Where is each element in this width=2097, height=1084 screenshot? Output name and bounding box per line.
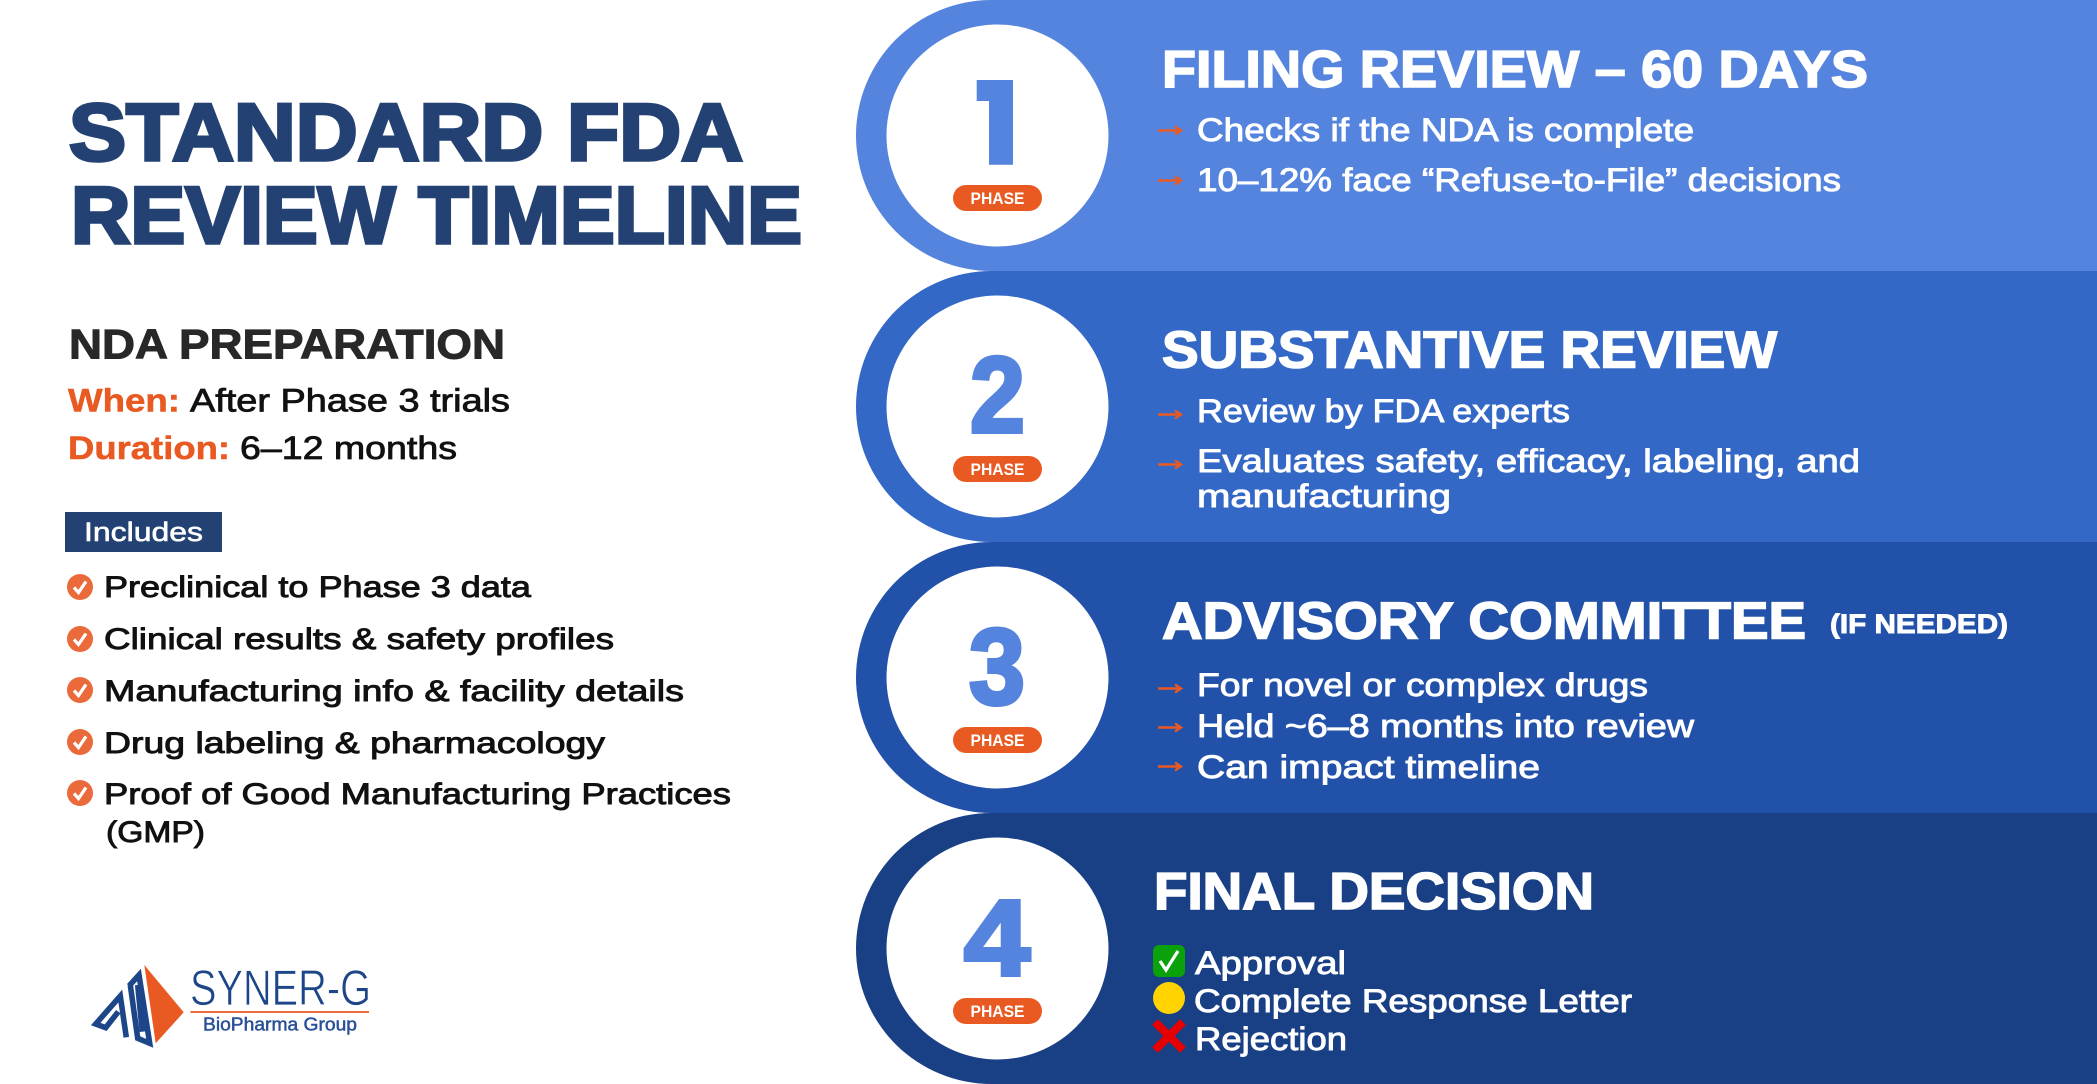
title: STANDARD FDA [69, 88, 743, 178]
logo mark [96, 965, 184, 1043]
text: duration: 6–12 months [240, 430, 457, 466]
title [69, 88, 802, 261]
panel: phase 4 final decision [856, 813, 2097, 1084]
item: good manufacturing practices: (GMP) [106, 816, 205, 849]
phase badge 4: PHASE [970, 1002, 1024, 1021]
label: includes [65, 512, 222, 552]
panel: NDA preparation [65, 320, 731, 849]
heading: NDA preparation: NDA PREPARATION [69, 320, 505, 368]
heading 4: FINAL DECISION [1154, 863, 1594, 921]
bullets 3: Can impact timeline [1197, 749, 1540, 785]
phase badge 2: PHASE [970, 460, 1024, 479]
phase badge 4: 4 [964, 877, 1030, 998]
logo: Syner-G BioPharma Group [96, 960, 371, 1043]
icon: yellow circle [1153, 982, 1185, 1014]
item: drug labeling: Drug labeling & pharmacology [104, 727, 605, 760]
phase badge 1 [886, 24, 1108, 246]
item: manufacturing info: Manufacturing info & facility details [104, 675, 684, 708]
panel: phase 3 advisory committee [856, 542, 2097, 813]
bullets 2 [1158, 393, 1860, 514]
bullets 2: manufacturing [1197, 478, 1451, 514]
icon: red cross [1155, 1022, 1183, 1050]
phase badge 3: PHASE [970, 731, 1024, 750]
text: when: After Phase 3 trials [190, 382, 510, 418]
wordmark: SYNER-G [190, 960, 371, 1016]
panel: phase 1 filing review [856, 0, 2097, 271]
item: preclinical data: Preclinical to Phase 3 data [104, 571, 531, 604]
heading 2: SUBSTANTIVE REVIEW [1162, 322, 1778, 380]
phase badge 1: PHASE [970, 189, 1024, 208]
text: duration: Duration: [68, 430, 230, 466]
heading 1: FILING REVIEW – 60 DAYS [1162, 41, 1868, 99]
label: includes: Includes [84, 517, 203, 547]
outcomes [1153, 945, 1632, 1057]
text: when [68, 382, 510, 418]
bullets 3: Held ~6–8 months into review [1197, 708, 1695, 744]
phase badge 4 [886, 838, 1108, 1060]
bullets 3 [1158, 667, 1695, 785]
icon: green check [1153, 945, 1185, 977]
outcomes: Complete Response Letter [1194, 983, 1632, 1019]
item: good manufacturing practices [67, 778, 731, 849]
phase badge 3 [886, 566, 1108, 788]
outcomes: Rejection [1195, 1021, 1347, 1057]
phase badge 2 [886, 296, 1108, 518]
tagline: BioPharma Group [203, 1014, 357, 1034]
phase badge 2: 2 [970, 334, 1025, 455]
bullets 1: Checks if the NDA is complete [1197, 112, 1694, 148]
bullets 2: Review by FDA experts [1197, 393, 1570, 429]
checklist [67, 571, 731, 849]
bullets 1: 10–12% face “Refuse-to-File” decisions [1197, 162, 1841, 198]
heading 3: (IF NEEDED) [1830, 609, 2008, 639]
panel: phase 2 substantive review [856, 271, 2097, 542]
item: clinical results: Clinical results & safety profiles [104, 623, 614, 656]
bullets 2: Evaluates safety, efficacy, labeling, and [1197, 443, 1860, 479]
title: REVIEW TIMELINE [71, 171, 802, 261]
item: good manufacturing practices: Proof of Good Manufacturing Practices [104, 778, 731, 811]
text: when: When: [68, 382, 180, 418]
bullets 1 [1158, 112, 1841, 198]
phase badge 3: 3 [969, 606, 1025, 727]
text: duration [68, 430, 457, 466]
bullets 3: For novel or complex drugs [1197, 667, 1648, 703]
phase badge 1: 1 [969, 64, 1031, 189]
heading 3: ADVISORY COMMITTEE [1162, 592, 1806, 650]
outcomes: Approval [1195, 945, 1346, 981]
